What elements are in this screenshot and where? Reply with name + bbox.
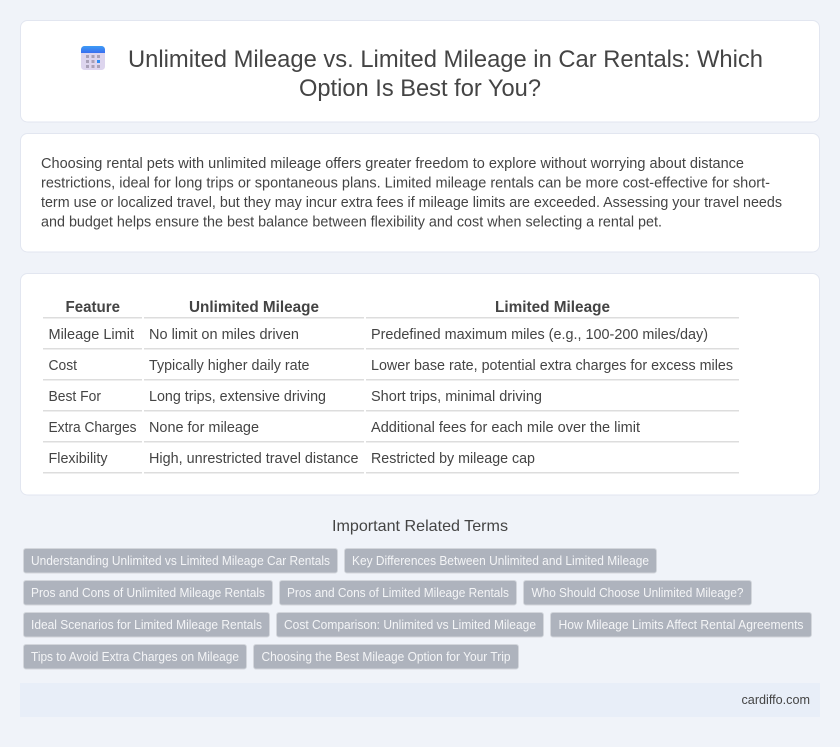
tag: cost comparison <box>276 612 544 637</box>
tag: choosing best option <box>254 644 518 669</box>
table row: best for: Short trips, minimal driving <box>371 389 542 405</box>
table row: flexibility: High, unrestricted travel distance <box>149 451 358 467</box>
tag: how mileage limits <box>550 612 812 637</box>
table row: flexibility: Restricted by mileage cap <box>371 451 535 467</box>
tag: tips: Tips to Avoid Extra Charges on Mileage <box>31 650 239 664</box>
table row: cost: Cost <box>48 358 77 374</box>
table row: cost <box>43 358 739 380</box>
tag: understanding <box>24 548 338 573</box>
table row: mileage limit: Mileage Limit <box>48 327 134 343</box>
text block: introduction paragraph: term use or localized travel, but they may incur extra fees if mileage limits are exceeded. Assessing your travel needs <box>41 195 782 211</box>
table row: mileage limit <box>43 327 739 350</box>
heading: important related terms: Important Related Terms <box>332 518 508 535</box>
tag: pros and cons unlimited <box>24 580 272 605</box>
tag: choosing best option: Choosing the Best Mileage Option for Your Trip <box>262 650 511 664</box>
table row: cost: Typically higher daily rate <box>149 358 310 374</box>
tag: who should choose <box>524 580 752 605</box>
tag: how mileage limits: How Mileage Limits Affect Rental Agreements <box>558 618 804 632</box>
text block: introduction paragraph <box>41 156 782 230</box>
tag: pros and cons unlimited: Pros and Cons of Unlimited Mileage Rentals <box>31 586 265 600</box>
table header row: Feature <box>66 299 120 316</box>
text block: introduction paragraph: Choosing rental pets with unlimited mileage offers greater freedom to explore without worrying about distance <box>41 156 744 172</box>
panel: introduction <box>20 134 820 252</box>
table header row: Unlimited Mileage <box>189 299 319 316</box>
panel: header <box>20 20 820 122</box>
tag: pros and cons limited <box>280 580 516 605</box>
title: Unlimited Mileage vs. Limited Mileage in Car Rentals: Which <box>128 46 763 73</box>
footer <box>20 683 820 717</box>
tag: who should choose: Who Should Choose Unlimited Mileage? <box>532 586 744 600</box>
related term tags <box>24 548 812 669</box>
table row: extra charges: None for mileage <box>149 420 259 436</box>
text block: introduction paragraph: and budget helps ensure the best balance between flexibility and cost when selecting a rental pet. <box>41 214 662 230</box>
title <box>128 46 763 102</box>
tag: key differences <box>344 548 656 573</box>
icon: calendar <box>81 46 105 70</box>
text block: introduction paragraph: restrictions, ideal for long trips or spontaneous plans. Limited mileage rentals can be more cost-effective for short- <box>41 176 770 192</box>
tag: cost comparison: Cost Comparison: Unlimited vs Limited Mileage <box>284 618 536 632</box>
table row: extra charges: Extra Charges <box>48 420 136 436</box>
footer source text: cardiffo.com <box>742 692 810 707</box>
table row: extra charges: Additional fees for each mile over the limit <box>371 420 640 436</box>
tag: understanding: Understanding Unlimited vs Limited Mileage Car Rentals <box>31 554 330 568</box>
table row: extra charges <box>43 420 739 442</box>
table row: mileage limit: Predefined maximum miles (e.g., 100-200 miles/day) <box>371 327 708 343</box>
table header row: Limited Mileage <box>495 299 610 316</box>
title: Option Is Best for You? <box>299 75 541 102</box>
table row: best for: Best For <box>48 389 101 405</box>
tag: key differences: Key Differences Between Unlimited and Limited Mileage <box>352 554 649 568</box>
table row: cost: Lower base rate, potential extra charges for excess miles <box>371 358 733 374</box>
table header row <box>43 299 739 318</box>
panel: comparison table <box>20 274 820 495</box>
table row: mileage limit: No limit on miles driven <box>149 327 299 343</box>
tag: ideal scenarios <box>24 612 270 637</box>
tag: ideal scenarios: Ideal Scenarios for Limited Mileage Rentals <box>31 618 262 632</box>
table row: flexibility: Flexibility <box>48 451 108 467</box>
tag: tips <box>24 644 246 669</box>
table row: flexibility <box>43 451 739 474</box>
table row: best for: Long trips, extensive driving <box>149 389 326 405</box>
tag: pros and cons limited: Pros and Cons of Limited Mileage Rentals <box>287 586 509 600</box>
table row: best for <box>43 389 739 412</box>
